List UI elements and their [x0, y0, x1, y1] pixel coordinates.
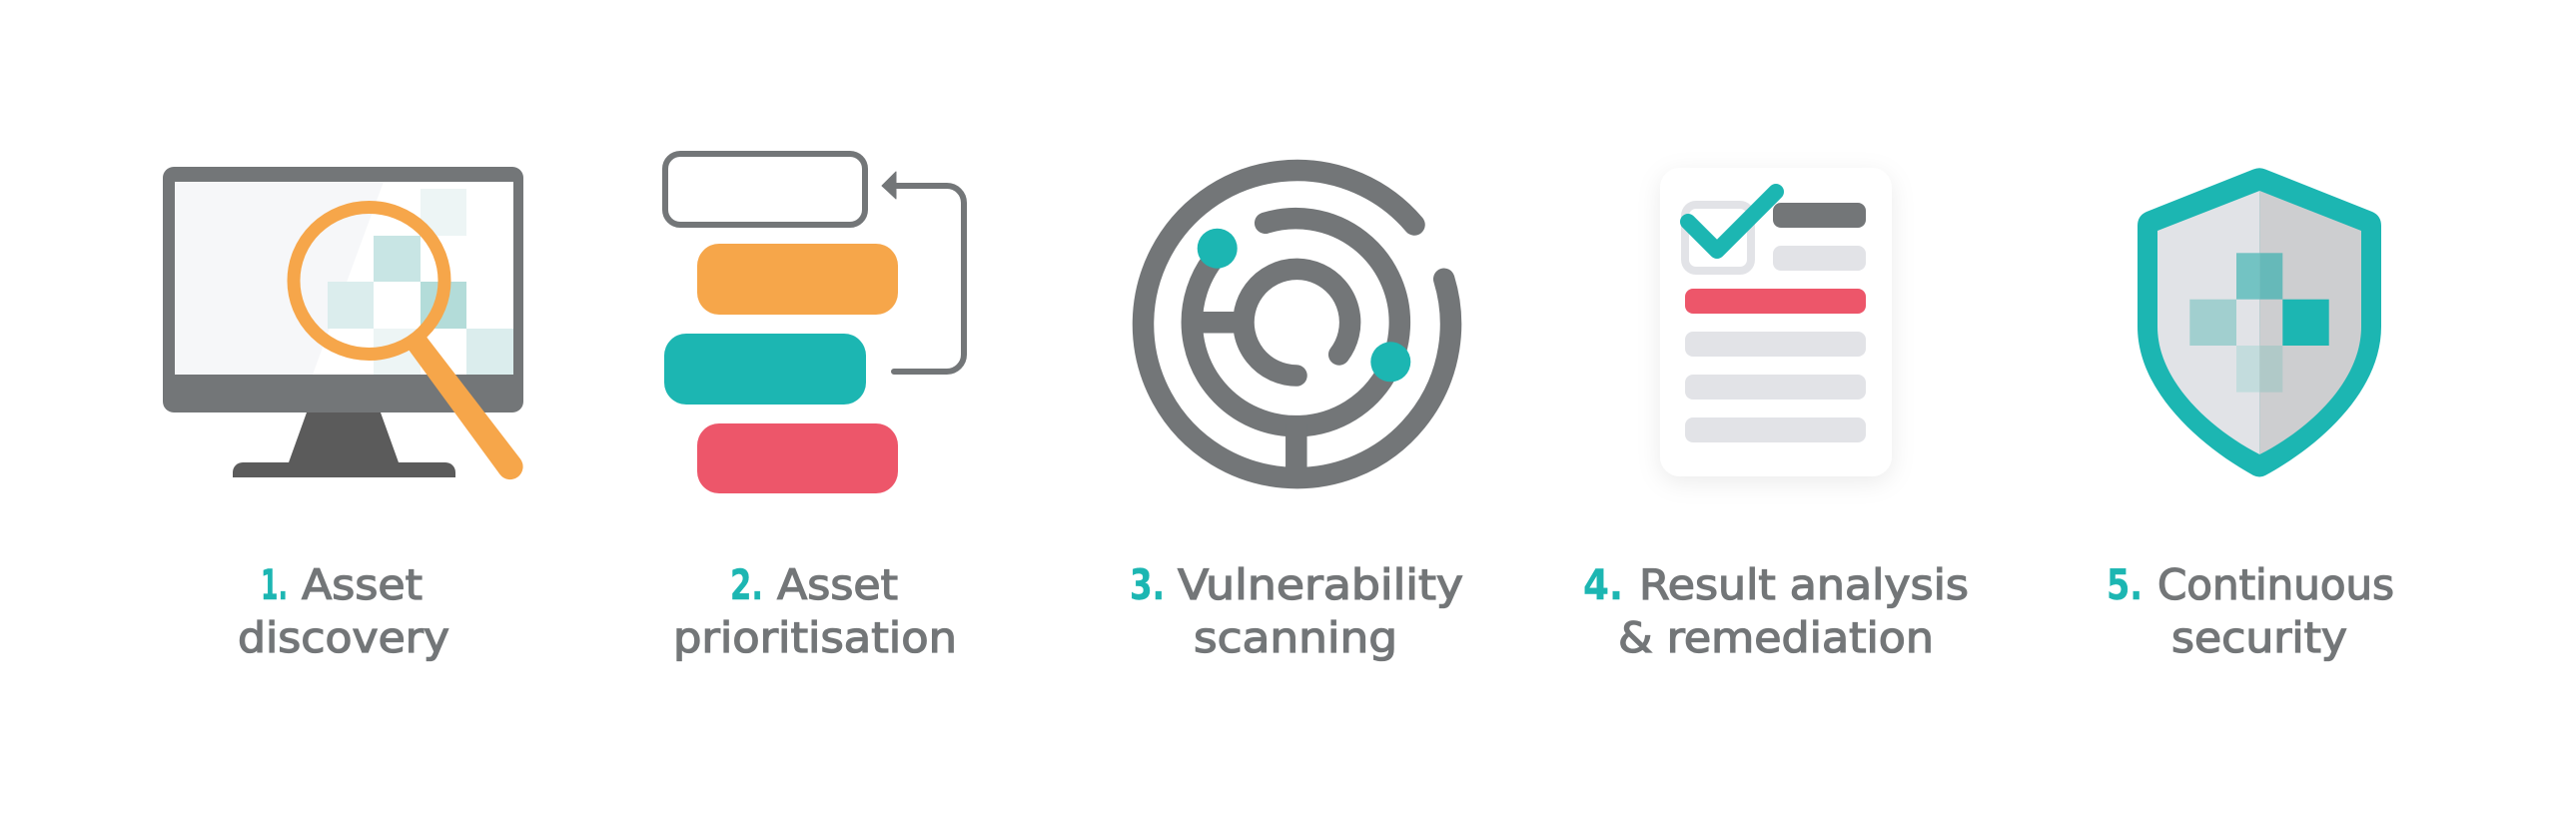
shield	[2138, 168, 2381, 477]
teal priority bar	[664, 334, 866, 405]
red priority bar	[697, 423, 898, 493]
icon: teal dot lower right	[1370, 342, 1410, 382]
label: 4. Result analysis & remediation: 4.	[1583, 560, 1623, 609]
arrow: reorder loop	[882, 172, 964, 372]
panel: vulnerability scanning icon	[1143, 171, 1450, 478]
orange priority bar	[697, 244, 898, 315]
label: 2. Asset prioritisation	[673, 560, 957, 662]
label: 3. Vulnerability scanning: 3.	[1130, 560, 1165, 609]
label: 5. Continuous security: 5.	[2107, 560, 2143, 609]
label: 1. Asset discovery: 1.	[261, 560, 288, 609]
panel: result analysis report icon	[1660, 168, 1892, 476]
icon: magnifying glass	[294, 208, 523, 479]
icon: teal dot upper left	[1198, 229, 1238, 269]
label: 3. Vulnerability scanning: scanning	[1194, 613, 1397, 662]
label: 1. Asset discovery: discovery	[238, 613, 449, 662]
label: 1. Asset discovery: Asset	[302, 560, 423, 609]
label: 5. Continuous security	[2107, 560, 2394, 662]
icon: check mark	[1688, 192, 1776, 251]
grey rows	[1685, 332, 1866, 442]
label: 4. Result analysis & remediation	[1583, 560, 1969, 662]
report card	[1660, 168, 1892, 476]
panel: asset discovery icon	[163, 167, 523, 479]
label: 2. Asset prioritisation: prioritisation	[673, 613, 957, 662]
label: 3. Vulnerability scanning: Vulnerability	[1178, 560, 1463, 609]
label: 2. Asset prioritisation: Asset	[777, 560, 898, 609]
panel: continuous security shield icon	[2138, 168, 2381, 477]
label: 3. Vulnerability scanning	[1130, 560, 1463, 662]
red row	[1685, 289, 1866, 314]
outlined priority bar	[665, 154, 865, 225]
light row	[1773, 246, 1866, 271]
icon: pixel cross	[2189, 253, 2329, 393]
panel: asset prioritisation icon	[664, 154, 964, 493]
label: 5. Continuous security: Continuous	[2157, 560, 2394, 609]
monitor	[163, 167, 523, 477]
checkbox	[1685, 205, 1751, 271]
label: 5. Continuous security: security	[2171, 613, 2347, 662]
label: 1. Asset discovery	[238, 560, 449, 662]
label: 2. Asset prioritisation: 2.	[730, 560, 763, 609]
label: 4. Result analysis & remediation: Result analysis	[1639, 560, 1969, 609]
dark row	[1773, 203, 1866, 228]
icon: maze rings	[1143, 171, 1450, 478]
label: 4. Result analysis & remediation: & remediation	[1618, 613, 1934, 662]
